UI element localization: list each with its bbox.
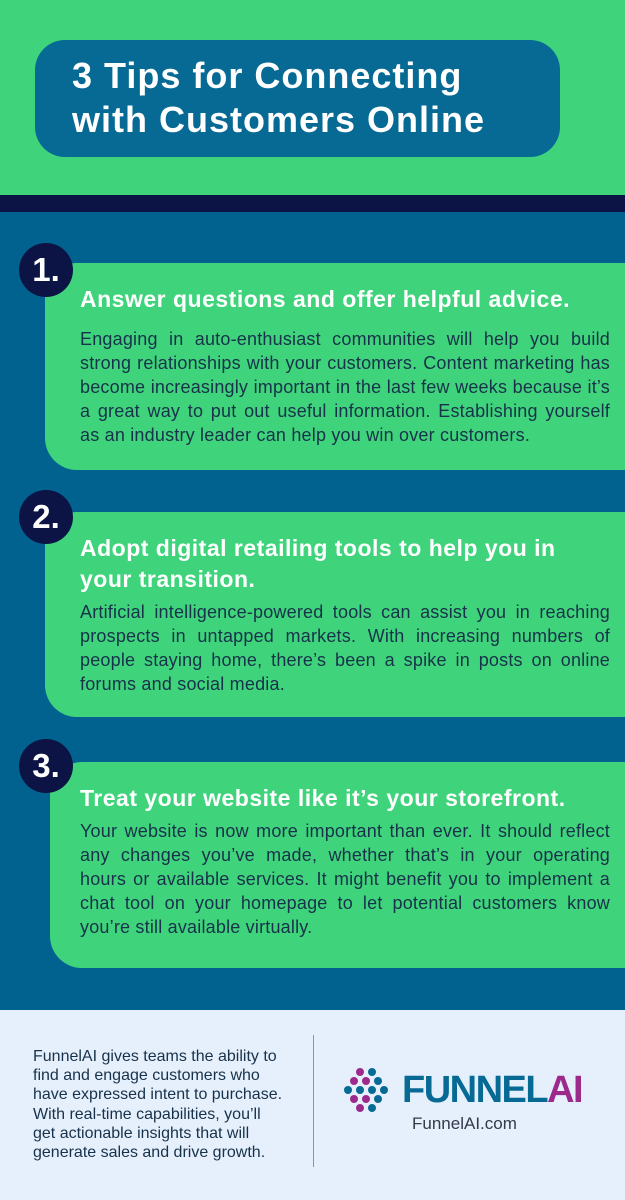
- footer text: get actionable insights that will: [33, 1125, 249, 1142]
- header background: [0, 0, 625, 195]
- footer text: generate sales and drive growth.: [33, 1144, 265, 1161]
- panel: tip 3: Treat your website like it’s your storefront.: [80, 785, 566, 811]
- footer text: have expressed intent to purchase.: [33, 1086, 282, 1103]
- icon: number 2: [19, 490, 73, 544]
- icon: number 1: 1.: [32, 251, 60, 288]
- icon: number 3: [19, 739, 73, 793]
- icon: number 1: [19, 243, 73, 297]
- footer text: FunnelAI gives teams the ability to: [33, 1048, 277, 1065]
- website: FunnelAI.com: [412, 1114, 517, 1133]
- footer: [0, 1010, 625, 1200]
- title: with Customers Online: [72, 99, 485, 140]
- title: [35, 40, 560, 157]
- panel: tip 3: [50, 762, 625, 968]
- title: 3 Tips for Connecting: [72, 55, 462, 96]
- footer text: With real-time capabilities, you’ll: [33, 1106, 261, 1123]
- panel: tip 2: Artificial intelligence-powered tools can assist you in reaching prospects in untapped markets. With increasing numbers of people staying home, there’s been a spike in posts on online forums and social media.: [80, 602, 610, 694]
- icon: number 3: 3.: [32, 747, 60, 784]
- panel: tip 2: Adopt digital retailing tools to help you in your transition.: [80, 535, 556, 592]
- panel: tip 1: Answer questions and offer helpful advice.: [80, 286, 570, 312]
- icon: number 2: 2.: [32, 498, 60, 535]
- panel: tip 1: Engaging in auto-enthusiast communities will help you build strong relationships with your customers. Content marketing has become increasingly important in the last few weeks because it’s a great way to put out useful information. Establishing yourself as an industry leader can help you win over customers.: [80, 329, 610, 445]
- panel: tip 3: Your website is now more important than ever. It should reflect any changes you’ve made, whether that’s in your operating hours or available services. It might benefit you to implement a chat tool on your homepage to let potential customers know you’re still available virtually.: [80, 821, 610, 937]
- dark band: [0, 195, 625, 212]
- panel: tip 1: [45, 263, 625, 470]
- footer text: find and engage customers who: [33, 1067, 260, 1084]
- logo: FUNNELAI: [402, 1069, 582, 1111]
- footer text: [33, 1048, 282, 1161]
- panel: tip 2: [45, 512, 625, 717]
